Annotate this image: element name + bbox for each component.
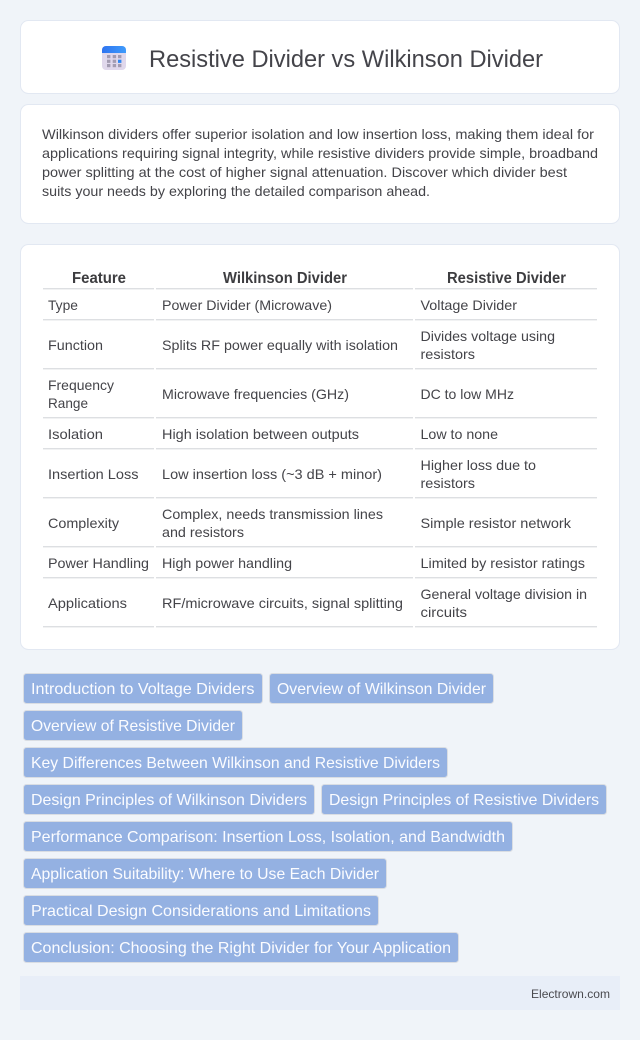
row: insertion loss: Insertion Loss	[48, 466, 138, 482]
row: frequency range: Frequency	[48, 377, 114, 393]
panel: comparison table	[20, 244, 620, 650]
table header row: Wilkinson Divider	[223, 270, 347, 287]
row: insertion loss: Low insertion loss (~3 dB + minor)	[162, 466, 382, 482]
row: isolation: Low to none	[420, 426, 498, 442]
tag: design principles Wilkinson	[24, 784, 314, 814]
row: complexity	[48, 506, 572, 540]
tag: overview of resistive	[24, 710, 242, 740]
tag: application suitability: Application Suitability: Where to Use Each Divider	[31, 866, 380, 883]
row: type: Power Divider (Microwave)	[162, 297, 332, 313]
row: power handling: High power handling	[162, 555, 292, 571]
tag: application suitability	[24, 858, 386, 888]
row: applications: Applications	[48, 595, 127, 611]
row: function: Splits RF power equally with isolation	[162, 337, 398, 353]
tag: design principles resistive	[322, 784, 606, 814]
text block: intro paragraph: power splitting at the cost of higher signal attenuation. Discover which divider best	[42, 164, 567, 180]
row: insertion loss: resistors	[420, 475, 475, 491]
tag: overview of Wilkinson: Overview of Wilkinson Divider	[277, 681, 487, 698]
text block: intro paragraph: Wilkinson dividers offer superior isolation and low insertion loss, making them ideal for	[42, 126, 594, 142]
tag: performance comparison: Performance Comparison: Insertion Loss, Isolation, and Bandwidth	[31, 829, 505, 846]
table header row	[72, 270, 566, 287]
row: frequency range: DC to low MHz	[420, 386, 514, 402]
tag: conclusion: Conclusion: Choosing the Right Divider for Your Application	[31, 940, 451, 957]
footer: Electrown.com	[531, 987, 610, 1001]
text block: intro paragraph	[42, 126, 598, 199]
row: insertion loss: Higher loss due to	[420, 457, 536, 473]
tag: introduction: Introduction to Voltage Dividers	[31, 681, 254, 698]
row: applications	[48, 586, 587, 620]
row: complexity: Complex, needs transmission lines	[162, 506, 383, 522]
row: type: Voltage Divider	[420, 297, 517, 313]
tag: practical design: Practical Design Considerations and Limitations	[31, 903, 371, 920]
row: type: Type	[48, 297, 78, 313]
row: complexity: Complexity	[48, 515, 119, 531]
footer	[20, 976, 620, 1010]
tag: design principles resistive: Design Principles of Resistive Dividers	[329, 792, 599, 809]
title: Resistive Divider vs Wilkinson Divider	[149, 46, 543, 73]
tag: introduction	[24, 674, 262, 704]
panel: topic tags	[24, 674, 606, 962]
panel: introduction	[20, 104, 620, 224]
row: function: Function	[48, 337, 103, 353]
tag: overview of Wilkinson	[270, 674, 494, 704]
row: frequency range: Microwave frequencies (GHz)	[162, 386, 349, 402]
icon: calendar grid	[102, 46, 126, 70]
row: complexity: and resistors	[162, 524, 244, 540]
row: frequency range	[48, 377, 514, 411]
tag: overview of resistive: Overview of Resistive Divider	[31, 718, 236, 735]
tag: performance comparison	[24, 822, 512, 852]
tag: key differences	[24, 748, 448, 778]
row: power handling: Power Handling	[48, 555, 149, 571]
table header row: Resistive Divider	[447, 270, 566, 287]
row: isolation: High isolation between outputs	[162, 426, 359, 442]
row: frequency range: Range	[48, 395, 88, 411]
row: function: resistors	[420, 346, 475, 362]
row: applications: General voltage division in	[420, 586, 587, 602]
tag: design principles Wilkinson: Design Principles of Wilkinson Dividers	[31, 792, 307, 809]
row: isolation	[48, 426, 498, 442]
row: function	[48, 328, 555, 362]
tag: key differences: Key Differences Between Wilkinson and Resistive Dividers	[31, 755, 440, 772]
row: applications: circuits	[420, 604, 467, 620]
row: complexity: Simple resistor network	[420, 515, 572, 531]
row: applications: RF/microwave circuits, signal splitting	[162, 595, 403, 611]
row: function: Divides voltage using	[420, 328, 555, 344]
table header row: Feature	[72, 270, 126, 287]
row: isolation: Isolation	[48, 426, 103, 442]
row: insertion loss	[48, 457, 536, 491]
row: type	[48, 297, 517, 313]
row: power handling	[48, 555, 585, 571]
text block: intro paragraph: suits your needs by exploring the detailed comparison ahead.	[42, 183, 430, 199]
text block: intro paragraph: applications requiring signal integrity, while resistive dividers provide simple, broadband	[42, 145, 598, 161]
row: power handling: Limited by resistor ratings	[420, 555, 585, 571]
panel: header	[20, 20, 620, 94]
tag: conclusion	[24, 932, 458, 962]
tag: practical design	[24, 896, 378, 926]
